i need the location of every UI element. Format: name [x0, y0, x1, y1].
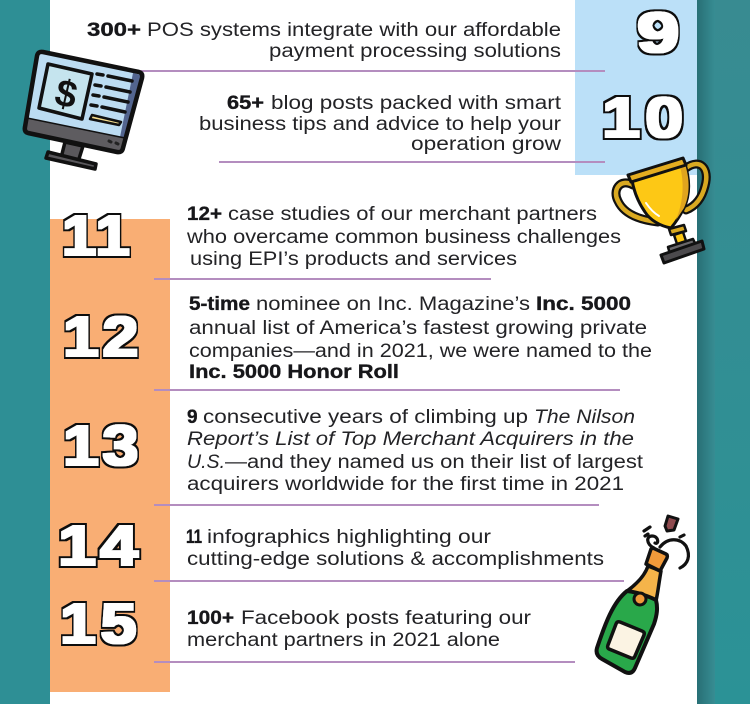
stat 10: blog posts: 65+	[227, 93, 264, 114]
stat 13: Nilson Report: 9	[187, 407, 198, 428]
stat 14: infographics: cutting-edge solutions & accomplishments	[187, 549, 604, 570]
number 12: 12	[63, 304, 138, 368]
stat 12: Inc. 5000: companies—and in 2021, we were named to the	[189, 341, 652, 362]
number 9: 9	[637, 2, 679, 65]
stat 11: case studies: case studies of our merchant partners	[228, 204, 597, 225]
stat 10: blog posts: business tips and advice to help your	[199, 114, 562, 135]
stat 12: Inc. 5000: 5-time	[189, 294, 250, 315]
stat 15: Facebook posts: Facebook posts featuring our	[241, 608, 532, 629]
stat 13: Nilson Report: acquirers worldwide for the first time in 2021	[187, 474, 624, 495]
number 10: 10	[602, 86, 683, 150]
stat 9: POS systems: POS systems integrate with our affordable	[147, 20, 561, 41]
stat 13: Nilson Report: The Nilson	[534, 407, 635, 428]
icon: computer monitor	[25, 52, 142, 169]
stat 14: infographics	[154, 527, 624, 582]
stat 13: Nilson Report	[154, 407, 644, 506]
stat 10: blog posts	[199, 93, 605, 163]
icon: computer monitor: $	[51, 72, 81, 118]
stat 11: case studies: who overcame common business challenges	[186, 227, 621, 248]
stat 11: case studies	[154, 204, 621, 280]
number 11: 11	[62, 203, 130, 267]
icon: champagne bottle	[597, 516, 688, 673]
stat 15: Facebook posts: 100+	[187, 608, 234, 629]
stat 12: Inc. 5000: Inc. 5000 Honor Roll	[189, 362, 399, 383]
number 13: 13	[63, 413, 138, 477]
stat 13: Nilson Report: Report’s List of Top Merchant Acquirers in the	[187, 429, 634, 450]
stat 14: infographics: infographics highlighting our	[207, 527, 492, 548]
number 14: 14	[58, 514, 138, 578]
panel: orange number column	[50, 219, 170, 692]
stat 11: case studies: 12+	[187, 204, 222, 225]
stat 9: POS systems: 300+	[87, 20, 141, 41]
stat 13: Nilson Report: U.S.	[187, 452, 225, 473]
stat 12: Inc. 5000: Inc. 5000	[536, 294, 631, 315]
number 15: 15	[60, 591, 136, 655]
stat 9: POS systems: payment processing solutions	[269, 41, 561, 62]
stat 11: case studies: using EPI’s products and services	[190, 249, 517, 270]
stat 15: Facebook posts	[154, 608, 575, 663]
stat 12: Inc. 5000: nominee on Inc. Magazine’s	[256, 294, 530, 315]
stat 14: infographics: 11	[186, 527, 202, 548]
stat 9: POS systems	[87, 20, 605, 72]
stat 10: blog posts: blog posts packed with smart	[271, 93, 562, 114]
stat 10: blog posts: operation grow	[411, 134, 561, 155]
stat 12: Inc. 5000: annual list of America’s fastest growing private	[189, 318, 647, 339]
panel: blue number column	[575, 0, 697, 175]
stat 13: Nilson Report: consecutive years of climbing up	[203, 407, 528, 428]
stat 12: Inc. 5000	[154, 294, 652, 391]
stat 13: Nilson Report: —and they named us on their list of largest	[225, 452, 644, 473]
stat 15: Facebook posts: merchant partners in 2021 alone	[187, 630, 500, 651]
icon: gold trophy	[616, 158, 706, 263]
